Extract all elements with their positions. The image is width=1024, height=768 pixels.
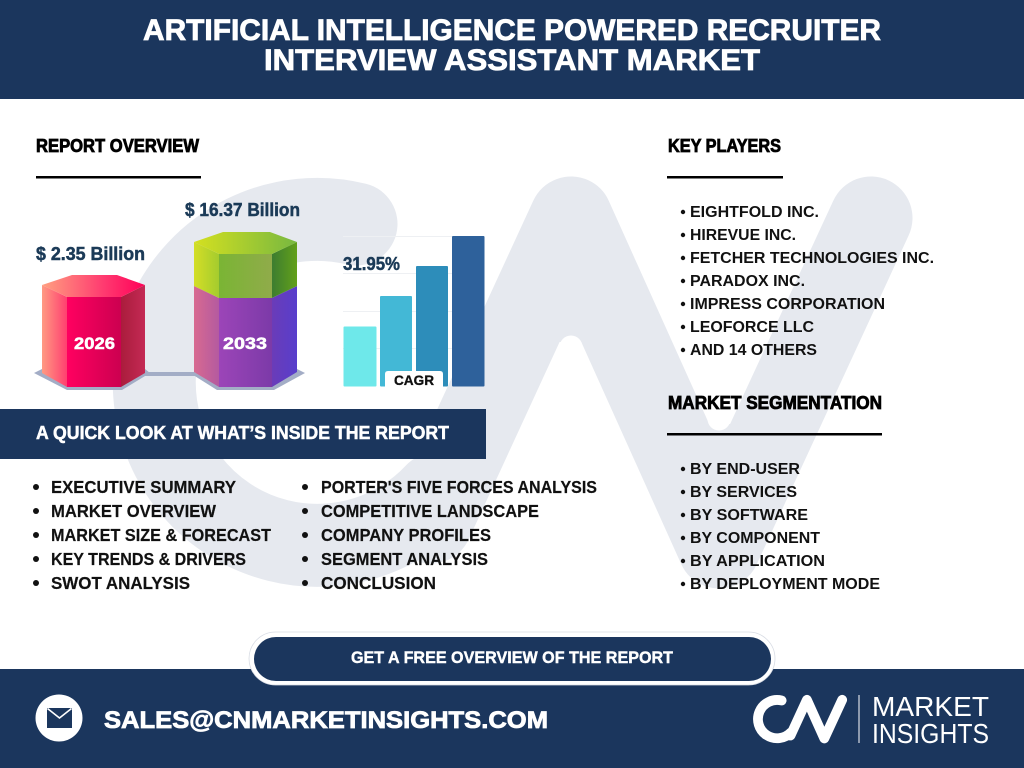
- list: report contents right: SEGMENT ANALYSIS: [321, 549, 488, 569]
- list: report contents right: COMPANY PROFILES: [321, 525, 491, 545]
- list: market segmentation: BY APPLICATION: [690, 553, 825, 570]
- list: report contents right: PORTER'S FIVE FORCES ANALYSIS: [321, 477, 597, 497]
- list: key players: AND 14 OTHERS: [690, 342, 817, 359]
- heading: report overview: REPORT OVERVIEW: [36, 136, 199, 156]
- list: report contents left: EXECUTIVE SUMMARY: [51, 477, 236, 497]
- CAGR tab: CAGR: [394, 373, 434, 388]
- chart: market size hexagons: [34, 200, 305, 390]
- watermark: CN logo: [154, 218, 871, 547]
- logo: CN market insights: [758, 691, 989, 749]
- header banner: [0, 0, 1024, 99]
- list: key players: HIREVUE INC.: [690, 227, 796, 244]
- list: report contents left: MARKET OVERVIEW: [51, 501, 216, 521]
- title: [143, 14, 881, 77]
- logo mark: [758, 700, 842, 738]
- list: key players: EIGHTFOLD INC.: [690, 204, 819, 221]
- logo text: MARKET: [872, 691, 989, 722]
- hexagon 2033: [194, 232, 297, 387]
- list: report contents left: MARKET SIZE & FORECAST: [51, 525, 271, 545]
- list: report contents right: COMPETITIVE LANDSCAPE: [321, 501, 539, 521]
- list: key players: FETCHER TECHNOLOGIES INC.: [690, 250, 934, 267]
- hexagon 2033: 2033: [223, 334, 267, 353]
- band: quick look heading: A QUICK LOOK AT WHAT’S INSIDE THE REPORT: [36, 423, 449, 443]
- list: market segmentation: BY COMPONENT: [690, 530, 820, 547]
- list: report contents left: SWOT ANALYSIS: [51, 573, 190, 593]
- list: market segmentation: BY SERVICES: [690, 484, 797, 501]
- heading: key players: [667, 136, 783, 178]
- contact email: SALES@CNMARKETINSIGHTS.COM: [104, 707, 548, 734]
- value 2033: $ 16.37 Billion: [185, 200, 300, 220]
- list: report contents left: KEY TRENDS & DRIVERS: [51, 549, 246, 569]
- list: key players: IMPRESS CORPORATION: [690, 296, 885, 313]
- heading: market segmentation: MARKET SEGMENTATION: [668, 393, 882, 413]
- footer bar: [0, 669, 1024, 768]
- list: key players: [681, 204, 934, 359]
- CAGR value: 31.95%: [343, 254, 400, 274]
- hexagon 2026: [42, 275, 145, 387]
- list: key players: PARADOX INC.: [690, 273, 805, 290]
- chart: CAGR bars: [343, 236, 484, 388]
- CAGR tab: [385, 371, 443, 388]
- button: free overview: GET A FREE OVERVIEW OF THE REPORT: [351, 648, 674, 667]
- icon: email envelope: [36, 694, 82, 742]
- hexagon base shadow: [34, 369, 305, 390]
- list: key players: LEOFORCE LLC: [690, 319, 814, 336]
- logo text: [872, 691, 989, 749]
- list: report contents right: CONCLUSION: [321, 573, 436, 593]
- value 2026: $ 2.35 Billion: [36, 244, 145, 264]
- title: INTERVIEW ASSISTANT MARKET: [264, 44, 760, 77]
- list: market segmentation: BY END-USER: [690, 461, 800, 478]
- list: market segmentation: [681, 461, 880, 593]
- logo text: INSIGHTS: [872, 718, 989, 749]
- list: market segmentation: BY DEPLOYMENT MODE: [690, 576, 880, 593]
- list: market segmentation: BY SOFTWARE: [690, 507, 808, 524]
- list: report contents right: [302, 477, 597, 593]
- hexagon 2026: 2026: [74, 334, 115, 353]
- button: free overview: [249, 632, 775, 685]
- list: report contents left: [33, 477, 271, 593]
- band: quick look heading: [0, 409, 486, 459]
- title: ARTIFICIAL INTELLIGENCE POWERED RECRUITER: [143, 14, 881, 47]
- heading: key players: KEY PLAYERS: [668, 136, 781, 156]
